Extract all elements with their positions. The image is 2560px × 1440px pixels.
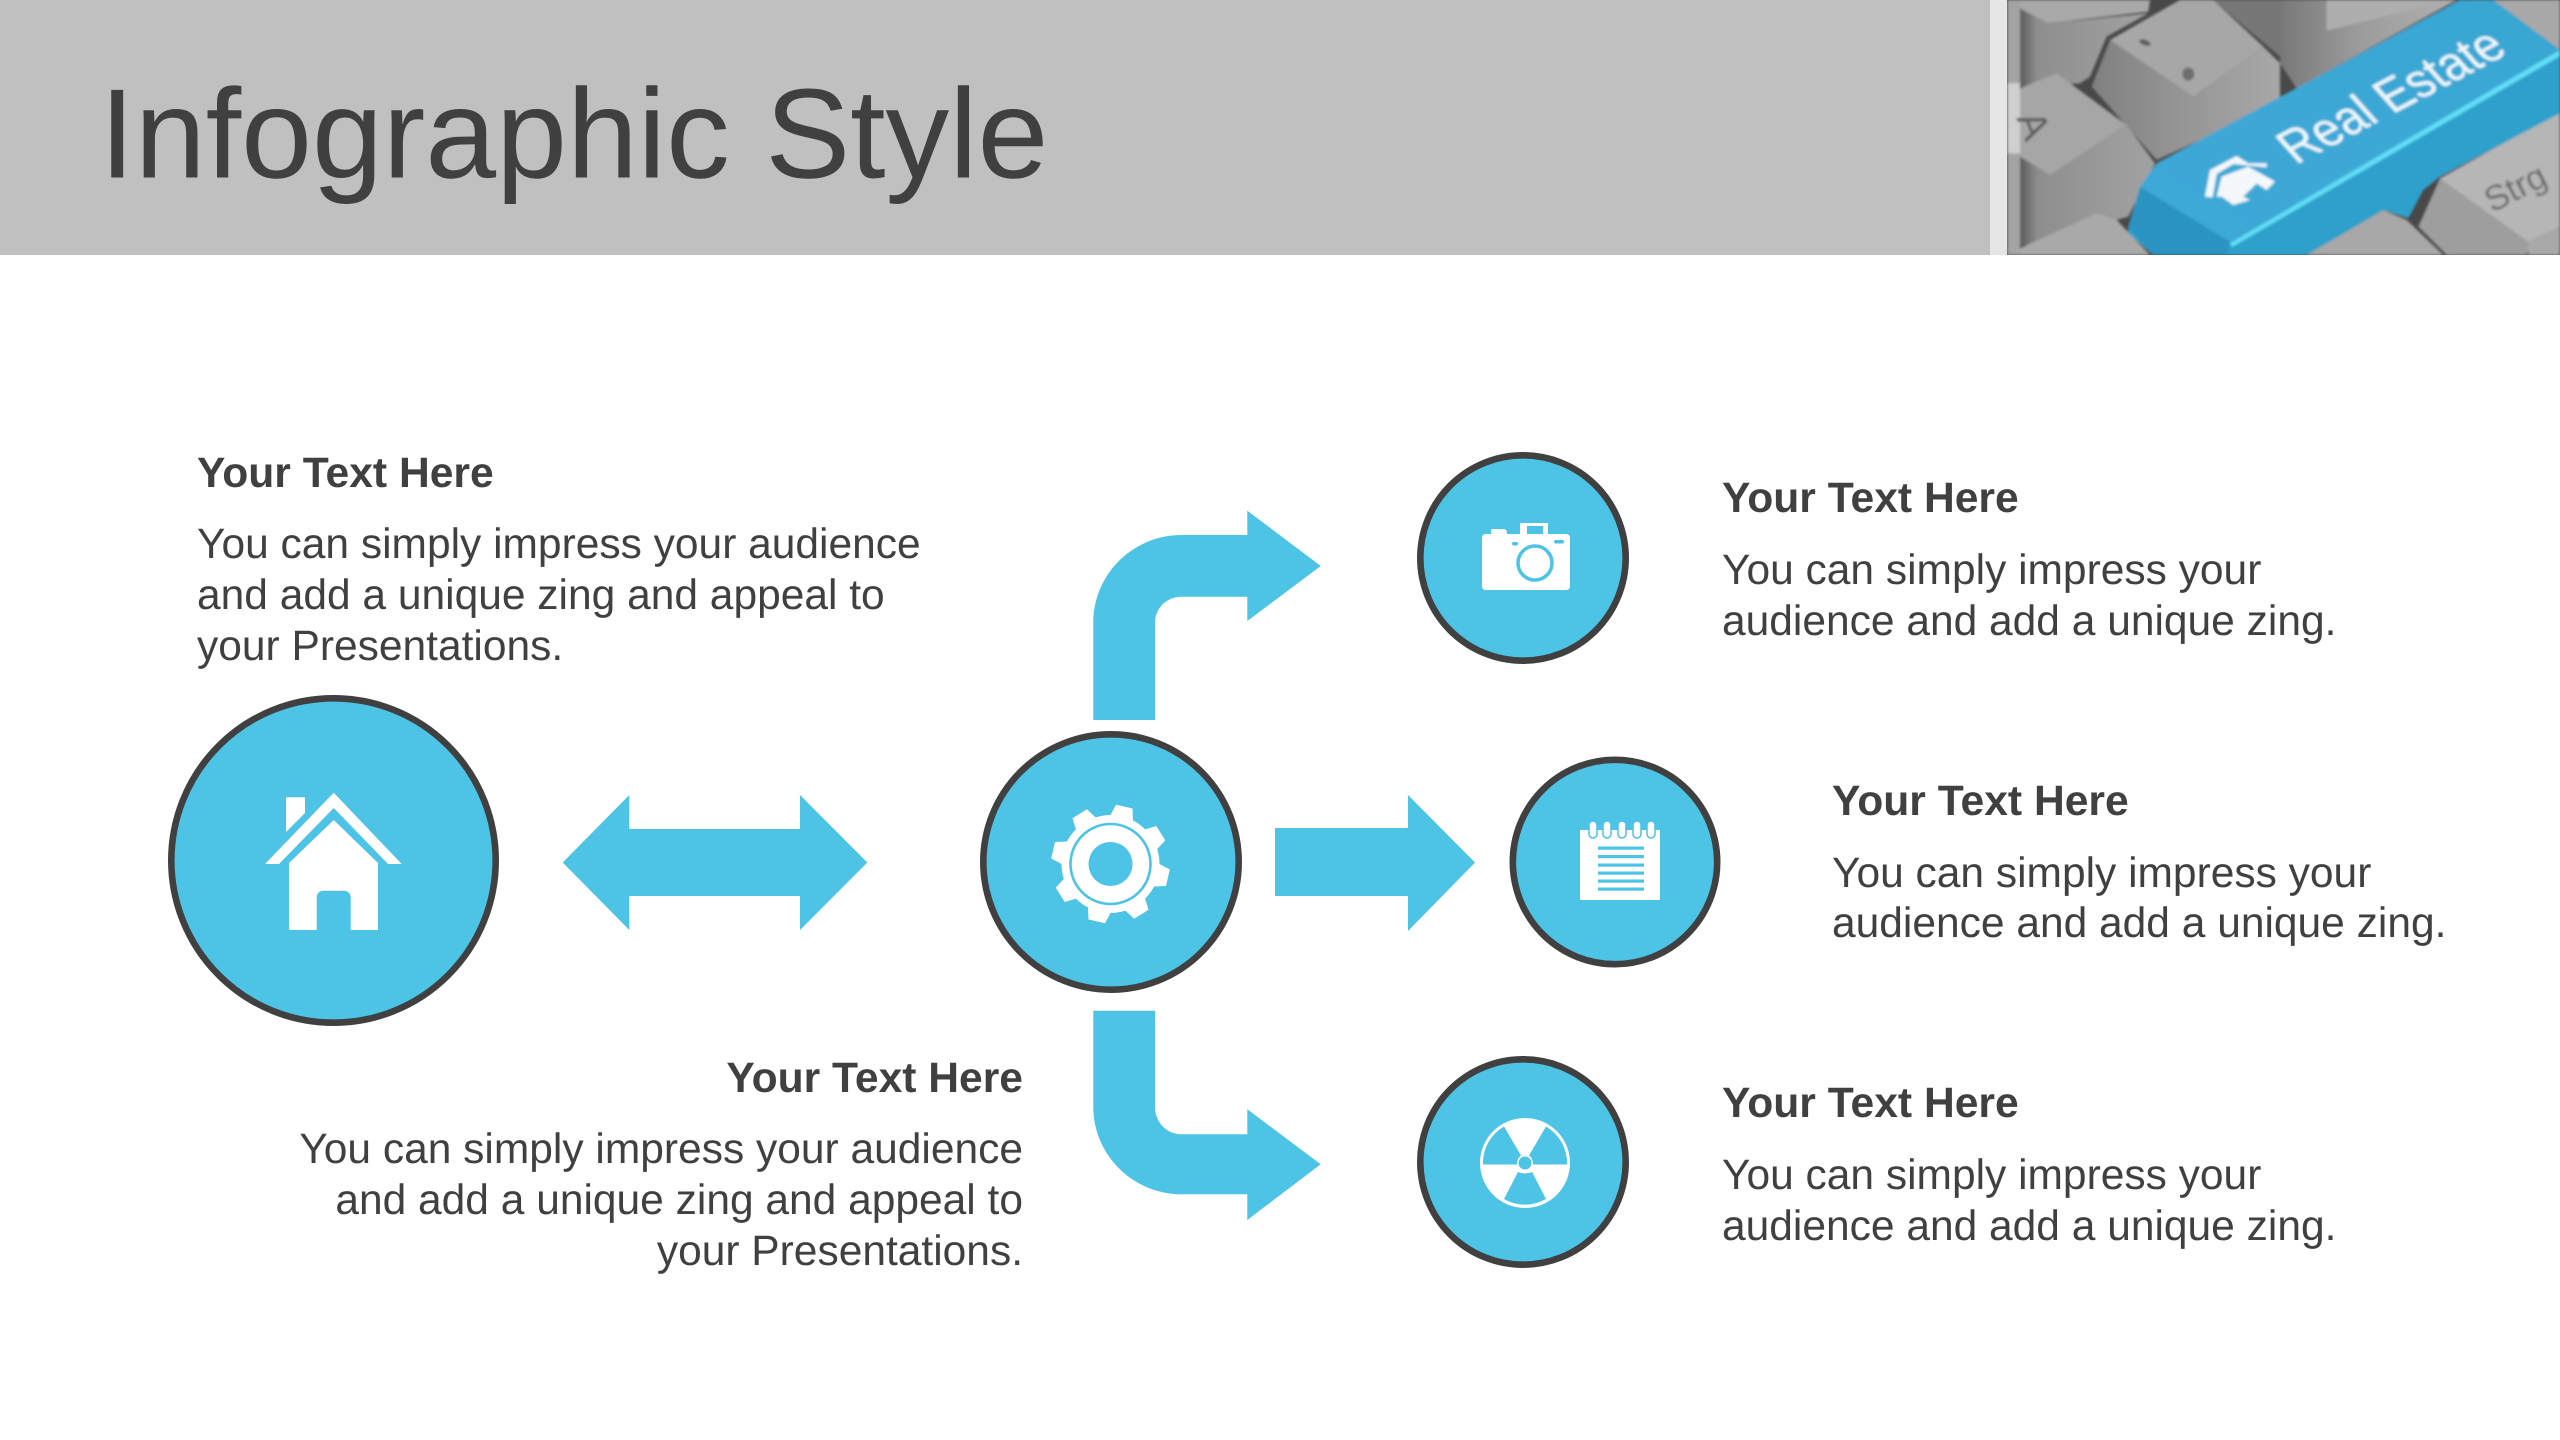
text block: radiation: audience and add a unique zing. [1722, 1203, 2336, 1250]
text block: top left [197, 449, 921, 670]
text block: bottom left: your Presentations. [657, 1228, 1023, 1275]
node: camera [1420, 455, 1626, 661]
icon: camera [1482, 523, 1570, 590]
text block: camera: Your Text Here [1722, 474, 2019, 522]
keycap lettering: Strg [2478, 156, 2553, 220]
text block: radiation [1722, 1079, 2336, 1250]
node: gear [983, 734, 1239, 990]
header band [0, 0, 2007, 255]
text block: notepad: You can simply impress your [1832, 850, 2371, 897]
title: Infographic Style [100, 62, 1048, 204]
keycap lettering: A [2008, 105, 2059, 146]
text block: notepad: audience and add a unique zing. [1832, 900, 2446, 947]
arrow: double headed [563, 795, 867, 930]
text block: bottom left: You can simply impress your audience [299, 1126, 1023, 1173]
text block: bottom left [299, 1054, 1023, 1275]
text block: radiation: You can simply impress your [1722, 1152, 2261, 1199]
node: radiation [1420, 1059, 1626, 1265]
photo: real estate keyboard key [2007, 0, 2560, 255]
text block: radiation: Your Text Here [1722, 1079, 2019, 1127]
text block: top left: your Presentations. [197, 623, 563, 670]
arrow: bent down to radiation [1093, 1011, 1321, 1220]
text block: notepad [1832, 777, 2446, 947]
icon: radiation [1480, 1118, 1570, 1208]
icon: notepad [1580, 821, 1660, 900]
text block: top left: and add a unique zing and appeal to [197, 572, 885, 619]
text block: notepad: Your Text Here [1832, 777, 2129, 825]
arrow: gear to notepad [1275, 795, 1475, 931]
node: notepad [1513, 760, 1717, 964]
text block: camera: audience and add a unique zing. [1722, 598, 2336, 645]
text block: bottom left: Your Text Here [726, 1054, 1023, 1102]
icon: gear [1050, 804, 1171, 924]
keycap lettering: Real Estate [2265, 18, 2517, 174]
text block: top left: You can simply impress your audience [197, 521, 921, 568]
arrow: bent up to camera [1093, 511, 1321, 720]
node: home [171, 698, 496, 1023]
icon: house [265, 793, 402, 930]
text block: camera [1722, 474, 2336, 645]
text block: top left: Your Text Here [197, 449, 494, 497]
text block: bottom left: and add a unique zing and appeal to [335, 1177, 1023, 1224]
keycap logo [2205, 156, 2275, 205]
keycap lettering [2015, 34, 2550, 211]
text block: camera: You can simply impress your [1722, 547, 2261, 594]
